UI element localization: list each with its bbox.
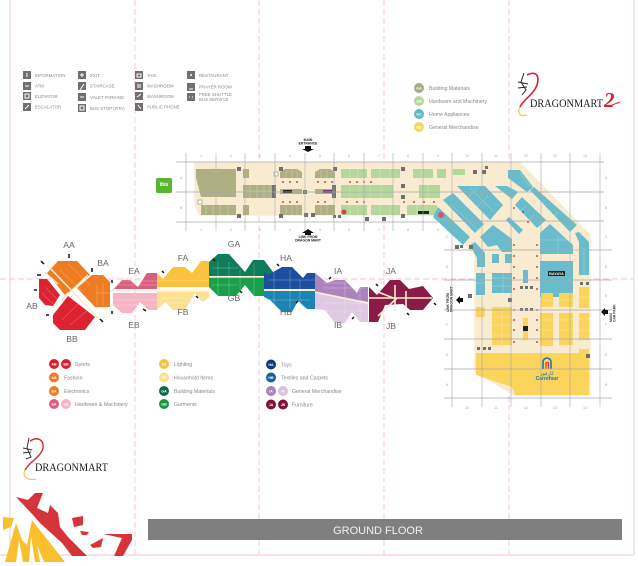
legend: facility icons: TAXI — [147, 73, 156, 78]
legend: upper floor zones: GB — [416, 99, 422, 103]
zone: BB sports — [53, 296, 95, 330]
legend: upper floor zones: Building Materials — [429, 86, 470, 92]
grid labels: 13 — [553, 406, 557, 410]
zone labels: JB — [386, 321, 396, 331]
zone: FA lighting — [157, 261, 209, 287]
grid labels: 9 — [437, 154, 439, 158]
legend: ground floor zones: Fashion — [64, 376, 83, 382]
grid labels: 9 — [437, 228, 439, 232]
grid labels: 12 — [524, 406, 528, 410]
zone: JA JB furniture — [369, 280, 433, 322]
legend: ground floor zones: AB — [51, 362, 57, 366]
grid labels: 1 — [200, 228, 202, 232]
legend: facility icons: BUS SERVICE — [199, 97, 229, 102]
floor plan: Dragon Mart wings — [26, 239, 436, 344]
legend: ground floor zones: JA — [269, 403, 274, 407]
grid lines — [176, 153, 612, 407]
legend: facility icons: INFORMATION — [35, 73, 65, 78]
legend: ground floor zones: HA — [268, 363, 274, 367]
zone labels: BB — [66, 334, 78, 344]
legend: ground floor zones: BB — [63, 362, 69, 366]
entrance: east — [601, 304, 616, 322]
legend: facility icons — [23, 71, 232, 112]
entrance: main: ENTRANCE — [299, 142, 318, 146]
legend: facility icons: RESTAURANT — [199, 73, 229, 78]
zone labels: EB — [128, 320, 140, 330]
legend: upper floor zones: General Merchandise — [429, 125, 479, 131]
grid labels: 4 — [289, 154, 291, 158]
legend: ground floor zones: Building Materials — [174, 389, 215, 395]
legend: ground floor zones: Hardware & Machinery — [75, 402, 128, 408]
map service icons — [237, 166, 590, 358]
zone: GA building materials — [209, 254, 273, 276]
banner: ground floor — [148, 519, 622, 540]
zone: GB garments — [209, 277, 264, 296]
legend: facility icons: BUS STOP (RTA) — [90, 106, 125, 111]
zone: FB household — [157, 292, 209, 310]
zone labels: JA — [386, 266, 396, 276]
legend: ground floor zones: Garments — [174, 402, 197, 408]
entrance: main — [299, 138, 318, 152]
legend: ground floor zones: EA — [52, 402, 57, 406]
entrance: west: LINK FROM — [446, 293, 450, 312]
hotel badge: ibis — [156, 178, 172, 193]
legend: facility icons: WASHROOM — [147, 84, 174, 88]
grid labels: B — [180, 206, 183, 210]
grid labels: 14 — [583, 406, 587, 410]
grid labels: 6 — [348, 154, 350, 158]
hotel badge: ibis: ibis — [160, 182, 169, 188]
grid labels: 3 — [259, 154, 261, 158]
entrance: east: CAR PARK — [612, 304, 616, 322]
legend: ground floor zones: HB — [268, 376, 274, 380]
grid labels: C — [446, 235, 449, 239]
legend: facility icons: ESCALATOR — [35, 104, 61, 110]
grid labels: 5 — [319, 228, 321, 232]
legend: ground floor zones: IA — [269, 389, 273, 393]
logo: Dragon Mart: DRAGONMART — [35, 462, 108, 474]
grid labels: 7 — [378, 154, 380, 158]
zone: IB general merchandise — [315, 293, 368, 323]
legend: upper floor zones: GC — [416, 112, 422, 116]
floor base — [195, 163, 590, 395]
grid labels: 8 — [407, 228, 409, 232]
legend: ground floor zones: Furniture — [292, 402, 313, 408]
legend: upper floor zones: GA — [416, 86, 422, 90]
zone labels: FB — [178, 307, 189, 317]
grid labels: 8 — [407, 154, 409, 158]
legend: upper floor zones: Hardware and Machinery — [429, 99, 487, 105]
shop markers — [282, 181, 538, 343]
legend: ground floor zones: General Merchandise — [292, 389, 342, 395]
zone labels: BA — [97, 258, 109, 268]
legend: facility icons: ELEVATOR — [35, 94, 58, 99]
legend: ground floor zones: Household Items — [174, 376, 213, 382]
grid labels: 12 — [524, 154, 528, 158]
grid labels: A — [180, 176, 183, 180]
zone: HA toys — [264, 267, 315, 289]
corridors and stall lines — [42, 262, 432, 325]
grid labels: D — [446, 265, 449, 269]
logo: Dragon Mart 2: 2 — [603, 88, 615, 112]
grid labels: 3 — [259, 228, 261, 232]
zone labels: FA — [178, 253, 189, 263]
zone: HB textiles — [264, 291, 315, 312]
logo: Carrefour: كارفور — [539, 371, 554, 377]
grid labels: F — [446, 323, 449, 327]
grid labels: 13 — [553, 154, 557, 158]
legend: ground floor zones: EB — [64, 402, 69, 406]
zone labels: IA — [334, 266, 342, 276]
legend: facility icons: FREE SHUTTLE — [199, 92, 232, 97]
zone: EB hardware — [113, 293, 157, 313]
grid labels: 5 — [319, 154, 321, 158]
legend: ground floor zones: JB — [281, 403, 286, 407]
entrance: west — [446, 285, 463, 312]
grid labels: 2 — [230, 154, 232, 158]
legend: ground floor zones: FA — [162, 362, 167, 366]
legend: facility icons: STAIRCASE — [90, 84, 115, 88]
grid labels: 11 — [494, 406, 498, 410]
legend: upper floor zones: GD — [416, 125, 422, 129]
zone labels: AA — [63, 240, 75, 250]
legend: ground floor zones: Sports — [75, 362, 90, 368]
zone: building materials — [196, 169, 335, 215]
entrance: link from Dragon Mart: LINK FROM — [299, 235, 318, 239]
grid labels: E — [446, 294, 449, 298]
zone: hardware and machinery — [341, 169, 465, 215]
grid labels: G — [446, 353, 449, 357]
zone labels: HB — [280, 307, 292, 317]
logo: Dragon Mart — [23, 438, 108, 479]
zone labels: AB — [26, 301, 38, 311]
legend: ground floor zones: IB — [281, 389, 285, 393]
legend: facility icons: VALET PARKING — [90, 95, 125, 100]
grid labels: F — [605, 323, 608, 327]
legend: ground floor zones: Toys — [281, 362, 292, 368]
legend: facility icons: ATM — [35, 84, 44, 88]
entrance: link from Dragon Mart: DRAGON MART — [295, 238, 322, 242]
zone: home appliances — [433, 170, 589, 297]
entrance: link from Dragon Mart — [295, 229, 322, 242]
legend: upper floor zones — [414, 83, 487, 132]
zone: AB sports — [39, 279, 60, 306]
grid labels: A — [605, 176, 608, 180]
legend: ground floor zones: AA — [51, 376, 57, 380]
zone labels: IB — [334, 320, 342, 330]
legend: facility icons: WASHROOM — [147, 94, 174, 99]
entrance: east: MAIN — [609, 313, 613, 322]
grid labels: 11 — [494, 154, 498, 158]
decoration: red calligraphy — [16, 493, 132, 556]
grid labels: 4 — [289, 228, 291, 232]
logo: Carrefour: Carrefour — [536, 376, 558, 382]
decoration: yellow calligraphy — [3, 517, 65, 562]
legend: ground floor zones: FB — [162, 376, 167, 380]
zone: EA hardware — [113, 273, 157, 290]
zone labels — [26, 239, 396, 344]
grid labels: 6 — [348, 228, 350, 232]
logo: Carrefour — [536, 358, 558, 382]
legend: facility icons: EXIT — [90, 73, 100, 78]
legend: ground floor zones: Electronics — [64, 389, 90, 395]
legend: ground floor zones: BA — [51, 389, 57, 393]
grid labels: H — [605, 383, 608, 387]
legend: ground floor zones — [49, 359, 342, 410]
grid labels: H — [446, 383, 449, 387]
legend: ground floor zones: Textiles and Carpets — [281, 376, 328, 382]
legend: ground floor zones: GA — [161, 389, 167, 393]
grid labels: 14 — [583, 154, 587, 158]
logo: Dragon Mart 2 — [518, 73, 620, 116]
grid labels: 10 — [465, 406, 469, 410]
grid labels: 10 — [465, 154, 469, 158]
grid labels: 2 — [230, 228, 232, 232]
entry arrows — [34, 254, 436, 322]
zone labels: GA — [228, 239, 240, 249]
grid labels: D — [605, 265, 608, 269]
zone labels: GB — [228, 293, 240, 303]
zone: IA general merchandise — [315, 273, 368, 302]
grid labels: E — [605, 294, 608, 298]
legend: facility icons: PRAYER ROOM — [199, 84, 232, 90]
grid labels: G — [605, 353, 608, 357]
floor plan: main building — [176, 138, 616, 410]
zone: home appliances: BAYAYA — [549, 272, 564, 276]
logo: Dragon Mart 2: DRAGONMART — [530, 98, 603, 110]
entrance: main: MAIN — [304, 138, 313, 142]
banner: ground floor: GROUND FLOOR — [333, 525, 423, 537]
grid labels: C — [605, 235, 608, 239]
entrance: west: DRAGON MART — [450, 285, 454, 312]
zone labels: EA — [128, 266, 140, 276]
zone: BA electronics — [77, 275, 110, 307]
zone: general merchandise — [476, 287, 589, 395]
grid labels: 7 — [378, 228, 380, 232]
legend: ground floor zones: GB — [161, 402, 167, 406]
zone: AA fashion — [47, 261, 90, 295]
grid labels — [180, 154, 608, 410]
grid labels: 1 — [200, 154, 202, 158]
legend: facility icons: PUBLIC PHONE — [147, 104, 180, 110]
grid labels: B — [605, 206, 608, 210]
zone labels: HA — [280, 253, 292, 263]
legend: upper floor zones: Home Appliances — [429, 112, 470, 118]
legend: ground floor zones: Lighting — [174, 362, 192, 368]
